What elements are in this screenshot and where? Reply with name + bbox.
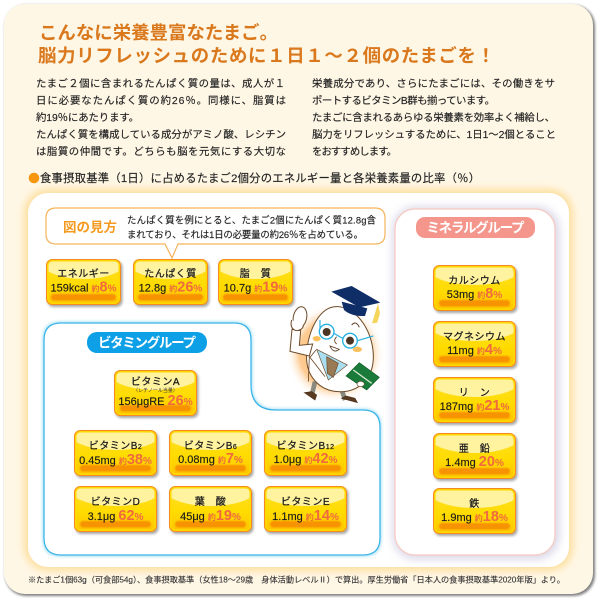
section heading: 食事摂取基準（1日）に占めるたまご2個分のエネルギー量と各栄養素量の比率（％）: [40, 171, 480, 185]
card: protein: 12.8g 約26%: [139, 280, 202, 296]
card: vitamin B6: ビタミンB6: [184, 440, 237, 452]
card: vitamin A: 156μgRE 26%: [118, 393, 193, 409]
card: phosphorus: 187mg 約21%: [440, 398, 509, 414]
card: calcium: 53mg 約8%: [447, 286, 502, 302]
card: fat: [214, 245, 298, 307]
card: energy: 159kcal 約8%: [51, 280, 117, 296]
card: vitamin E: [260, 472, 352, 534]
card: vitamin D: 3.1μg 62%: [88, 508, 144, 524]
card: vitamin A: [110, 356, 202, 418]
card: folate: [164, 472, 256, 534]
card: vitamin B2: [70, 416, 162, 478]
text block: left column: 日に必要なたんぱく質の約26％。同様に、脂質は: [36, 94, 286, 107]
card: iron: 鉄: [469, 497, 480, 510]
card: energy: エネルギー: [57, 268, 110, 280]
card: folate: 葉 酸: [195, 495, 226, 508]
text block: left column: たまご２個に含まれるたんぱく質の量は、成人が１: [36, 77, 285, 90]
card: vitamin B12: [260, 416, 352, 478]
card: vitamin B2: ビタミンB2: [89, 440, 142, 452]
panel: vitamin group: [44, 323, 380, 555]
shirt and coat: [317, 349, 347, 380]
text block: left column: たんぱく質を構成している成分がアミノ酸、レシチン: [36, 128, 286, 141]
card: vitamin D: ビタミンD: [91, 496, 140, 508]
card: zinc: 亜 鉛: [459, 443, 490, 455]
card: vitamin B12: ビタミンB12: [277, 440, 334, 452]
heading: mineral group: ミネラルグループ: [426, 220, 525, 236]
text block: left column: [36, 77, 286, 158]
card: protein: [128, 245, 212, 307]
illustration: egg professor: [286, 286, 384, 403]
card: calcium: [428, 251, 520, 313]
card: vitamin B12: 1.0μg 約42%: [274, 451, 338, 467]
card: magnesium: [428, 307, 520, 369]
footnote: ※たまご1個63g（可食部54g）、食事摂取基準（女性18～29歳 身体活動レベルⅡ）で算出。厚生労働省「日本人の食事摂取基準2020年版」より。: [28, 574, 565, 584]
card: vitamin A: （レチノール当量）: [133, 387, 178, 394]
text block: right column: ポートするビタミンB群も揃っています。: [312, 94, 495, 107]
panel: white chart area: [24, 189, 573, 571]
card: iron: 1.9mg 約18%: [441, 509, 508, 525]
text block: right column: をおすすめします。: [312, 146, 397, 158]
card: vitamin B6: [164, 416, 256, 478]
card: phosphorus: リ ン: [459, 388, 490, 399]
card: folate: 45μg 約19%: [180, 508, 241, 524]
text block: right column: 脳力をリフレッシュするために、1日1～2個とること: [312, 128, 556, 141]
card: vitamin D: [70, 472, 162, 534]
card: vitamin A: ビタミンA: [131, 376, 180, 388]
callout: how to read the chart: まれており、それは1日の必要量の約26％を占めている。: [127, 229, 363, 240]
callout: how to read the chart: 図の見方: [63, 219, 117, 235]
card: magnesium: 11mg 約4%: [447, 342, 502, 358]
card: phosphorus: [428, 363, 520, 425]
body: [307, 307, 373, 392]
card: iron: [428, 474, 520, 536]
card: vitamin B6: 0.08mg 約7%: [178, 451, 243, 467]
text block: right column: たまごに含まれるあらゆる栄養素を効率よく補給し、: [312, 111, 555, 124]
card: fat: 10.7g 約19%: [224, 280, 287, 296]
heading: vitamin group: [87, 332, 207, 353]
card: vitamin E: 1.1mg 約14%: [272, 508, 339, 524]
card: energy: [42, 245, 126, 307]
text block: left column: 約19％にあたります。: [36, 111, 139, 124]
panel: mineral group: [392, 206, 560, 560]
card: calcium: カルシウム: [448, 275, 501, 287]
card: zinc: [428, 419, 520, 481]
text block: left column: は脂質の仲間です。どちらも脳を元気にする大切な: [36, 145, 286, 158]
arm with egg: [290, 329, 313, 356]
text block: right column: 栄養成分であり、さらにたまごには、その働きをサ: [312, 77, 555, 90]
callout: how to read the chart: たんぱく質を例にとると、たまご2個にたんぱく質12.8g含: [127, 214, 377, 226]
text block: right column: [312, 77, 556, 158]
card: fat: 脂 質: [240, 267, 271, 280]
card: zinc: 1.4mg 20%: [445, 454, 504, 470]
callout: how to read the chart: [46, 208, 385, 258]
title: 脳力リフレッシュのために１日１～２個のたまごを！: [38, 45, 495, 66]
card: vitamin E: ビタミンE: [281, 496, 330, 508]
glasses and face: [319, 324, 334, 339]
cap: [342, 302, 367, 316]
card: protein: たんぱく質: [144, 267, 197, 280]
title: [38, 22, 495, 66]
card: magnesium: マグネシウム: [443, 330, 506, 343]
book: [346, 363, 379, 390]
heading: vitamin group: ビタミングループ: [98, 334, 196, 350]
card: vitamin B2: 0.45mg 約38%: [79, 452, 152, 468]
heading: mineral group: [416, 217, 535, 238]
title: こんなに栄養豊富なたまご。: [39, 22, 278, 43]
legs: [312, 382, 345, 400]
